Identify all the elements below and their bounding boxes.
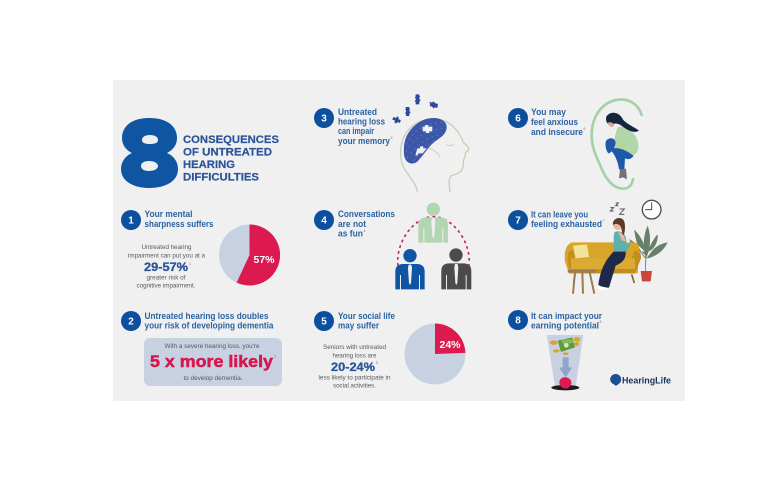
heading 3: 3 — [390, 136, 392, 140]
callout box: to develop dementia. — [184, 375, 243, 382]
arrow — [559, 357, 572, 377]
number badge 7: 7 — [515, 216, 521, 226]
sofa — [565, 242, 641, 283]
person: blue — [395, 249, 425, 289]
person: green — [418, 203, 448, 243]
number badge 3: 3 — [321, 114, 327, 124]
pie chart 24% — [404, 324, 466, 384]
text block 1: Untreated hearing — [142, 244, 192, 251]
heading text — [183, 134, 279, 184]
number badge 3 — [314, 108, 334, 128]
callout box: 5 x more likely — [150, 353, 274, 371]
text block 1: 29-57% — [144, 260, 188, 274]
big number 8 — [121, 118, 178, 188]
heading 8: It can impact your — [531, 311, 602, 321]
cushion — [573, 244, 589, 258]
heading 2 — [144, 311, 274, 330]
heading 3: your memory — [338, 136, 390, 146]
heading 4 — [338, 209, 395, 239]
text block 5: 5 — [376, 361, 378, 365]
heading 1: Your mental — [144, 209, 192, 219]
heading 7: 7 — [602, 219, 604, 223]
heading 2: your risk of developing dementia — [144, 320, 274, 330]
heading 1: sharpness suffers — [144, 219, 214, 229]
heading text: HEARING — [183, 159, 235, 171]
heading text: DIFFICULTIES — [183, 172, 259, 184]
coins and cash — [550, 337, 580, 355]
heading 5: may suffer — [338, 320, 379, 330]
pie chart 24%: 24% — [440, 340, 461, 351]
panel 4: conversations — [314, 203, 471, 289]
text block 5: 20-24% — [331, 360, 375, 374]
text block 5: social activities. — [333, 382, 376, 390]
heading 8: 8 — [600, 320, 602, 324]
panel 7: exhausted — [508, 200, 668, 294]
number badge 6: 6 — [515, 114, 521, 124]
heading 5 — [338, 311, 395, 330]
person: grey — [441, 248, 471, 289]
panel 3: memory — [314, 94, 469, 192]
icon: woman curled in ear — [592, 100, 642, 189]
heading 6: feel anxious — [531, 117, 578, 127]
heading 3: hearing loss — [338, 116, 385, 126]
icon: tired woman on sofa with clock and plant — [565, 200, 668, 294]
heading 3: Untreated — [338, 107, 377, 117]
logo: HearingLife — [610, 374, 671, 386]
text block 1 — [128, 244, 205, 290]
text block 1: 1 — [189, 262, 191, 266]
heading 6 — [531, 107, 586, 137]
number badge 2: 2 — [128, 316, 134, 328]
number badge 7 — [508, 210, 528, 230]
heading 8: earning potential — [531, 320, 599, 330]
logo: HearingLife: HearingLife — [622, 376, 671, 386]
text block 1: cognitive impairment. — [136, 282, 196, 290]
number badge 2 — [121, 311, 141, 331]
panel 6: anxious — [508, 100, 642, 189]
background panel — [113, 80, 685, 401]
text block 5: hearing loss are — [332, 352, 377, 359]
heading 7: feeling exhausted — [531, 219, 602, 229]
heading 4: 4 — [364, 229, 366, 233]
number badge 4 — [314, 210, 334, 230]
pie chart 57%: 57% — [254, 255, 275, 266]
panel 1: mental sharpness — [121, 209, 280, 290]
heading 8 — [531, 311, 602, 330]
heading 4: are not — [338, 219, 366, 229]
heading 1 — [144, 209, 214, 229]
number badge 8: 8 — [515, 316, 521, 326]
text block 1: greater risk of — [146, 274, 186, 282]
heading 5: Your social life — [338, 311, 395, 321]
woman — [597, 218, 630, 290]
panel 2: dementia — [121, 311, 282, 386]
icon: money falling into hole — [547, 335, 583, 390]
callout box: 2 — [274, 355, 276, 359]
text block 5 — [318, 344, 391, 390]
number badge 1: 1 — [128, 216, 134, 226]
plant — [629, 226, 668, 281]
heading 7 — [531, 210, 604, 229]
heading 6: and insecure — [531, 127, 583, 137]
callout box: With a severe hearing loss, you're — [164, 343, 260, 350]
heading 3 — [338, 107, 392, 146]
heading 6: 6 — [584, 127, 586, 131]
pie chart 57% — [219, 224, 280, 286]
heading text: OF UNTREATED — [183, 146, 272, 158]
text block 1: impairment can put you at a — [128, 252, 205, 259]
number badge 4: 4 — [321, 216, 327, 226]
heading 4: as fun — [338, 229, 363, 239]
text block 5: less likely to participate in — [318, 374, 391, 382]
number badge 5 — [314, 311, 334, 331]
heading 7: It can leave you — [531, 210, 588, 220]
heading text: CONSEQUENCES — [183, 134, 279, 146]
piggy bank — [559, 377, 571, 389]
text block 5: Seniors with untreated — [323, 344, 386, 351]
callout box — [144, 338, 282, 386]
icon: head with puzzle brain — [392, 94, 469, 192]
number badge 1 — [121, 210, 141, 230]
icon: three people with dotted arc — [395, 203, 471, 289]
panel 8: earning — [508, 310, 602, 390]
title block — [121, 118, 279, 188]
hole — [551, 385, 579, 390]
snore letters — [610, 203, 624, 214]
side table — [568, 271, 596, 294]
heading 4: Conversations — [338, 209, 395, 219]
panel 5: social life — [314, 311, 466, 390]
clock — [642, 200, 661, 219]
number badge 5: 5 — [321, 316, 327, 328]
heading 6: You may — [531, 107, 566, 117]
heading 3: can impair — [338, 126, 374, 136]
heading 2: Untreated hearing loss doubles — [144, 311, 268, 321]
